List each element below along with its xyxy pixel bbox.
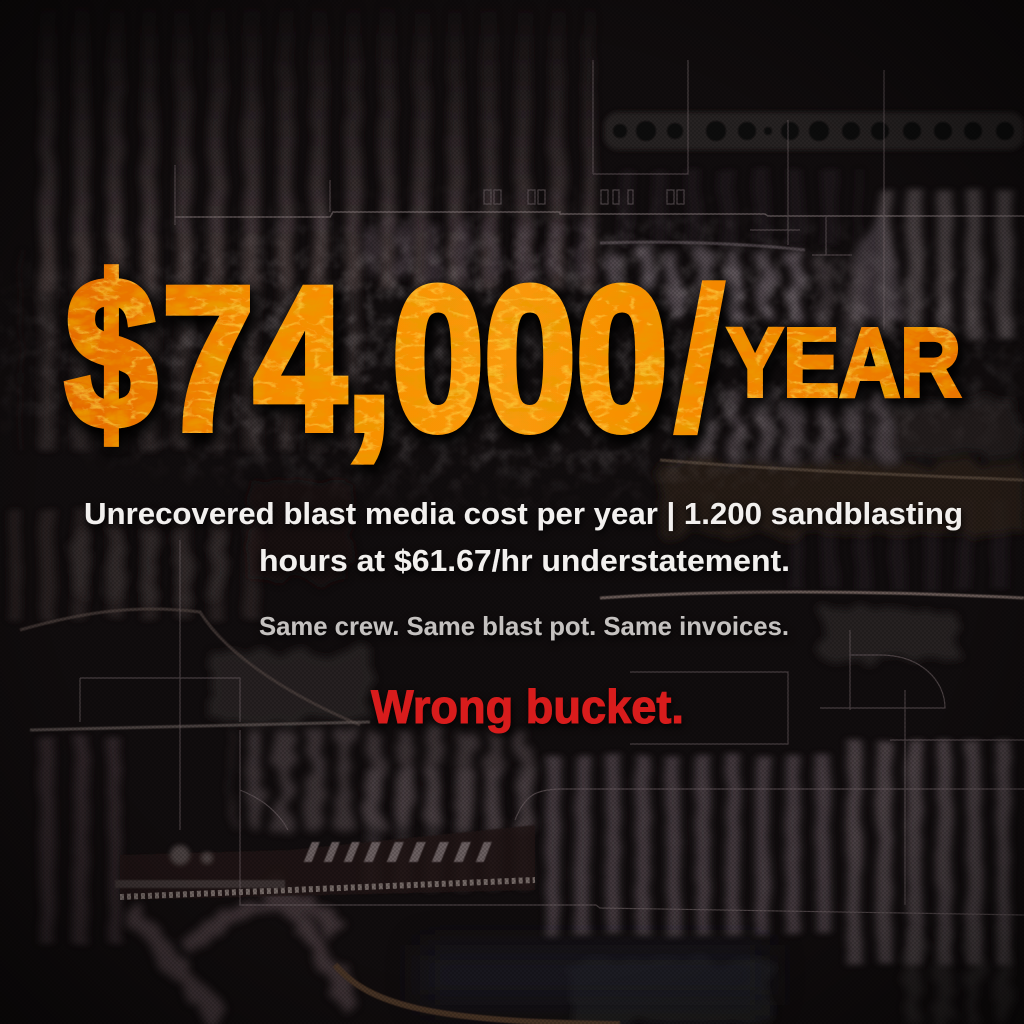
subtitle line 2: hours at $61.67/hr understatement. [259, 543, 790, 578]
dollar sign: $ [65, 234, 157, 473]
rings row [604, 112, 1024, 150]
curved base bottom [335, 965, 620, 1024]
lumpy textured blobs [60, 225, 1024, 1024]
grit + halftone [12, 213, 1019, 494]
punchline: Wrong bucket. [371, 680, 684, 733]
amount: 74,000 [162, 245, 668, 473]
supporting line: Same crew. Same blast pot. Same invoices. [259, 611, 789, 641]
bottom bluish panel [420, 945, 770, 1005]
belt band [115, 825, 535, 900]
subtitle line 1: Unrecovered blast media cost per year | 1.200 sandblasting [84, 496, 963, 531]
headline: $74,000/YEAR [65, 234, 961, 476]
YEAR: YEAR [727, 308, 961, 417]
thin blueprint lines [80, 60, 1024, 915]
slash: / [671, 244, 728, 476]
bright seams [20, 242, 1024, 730]
